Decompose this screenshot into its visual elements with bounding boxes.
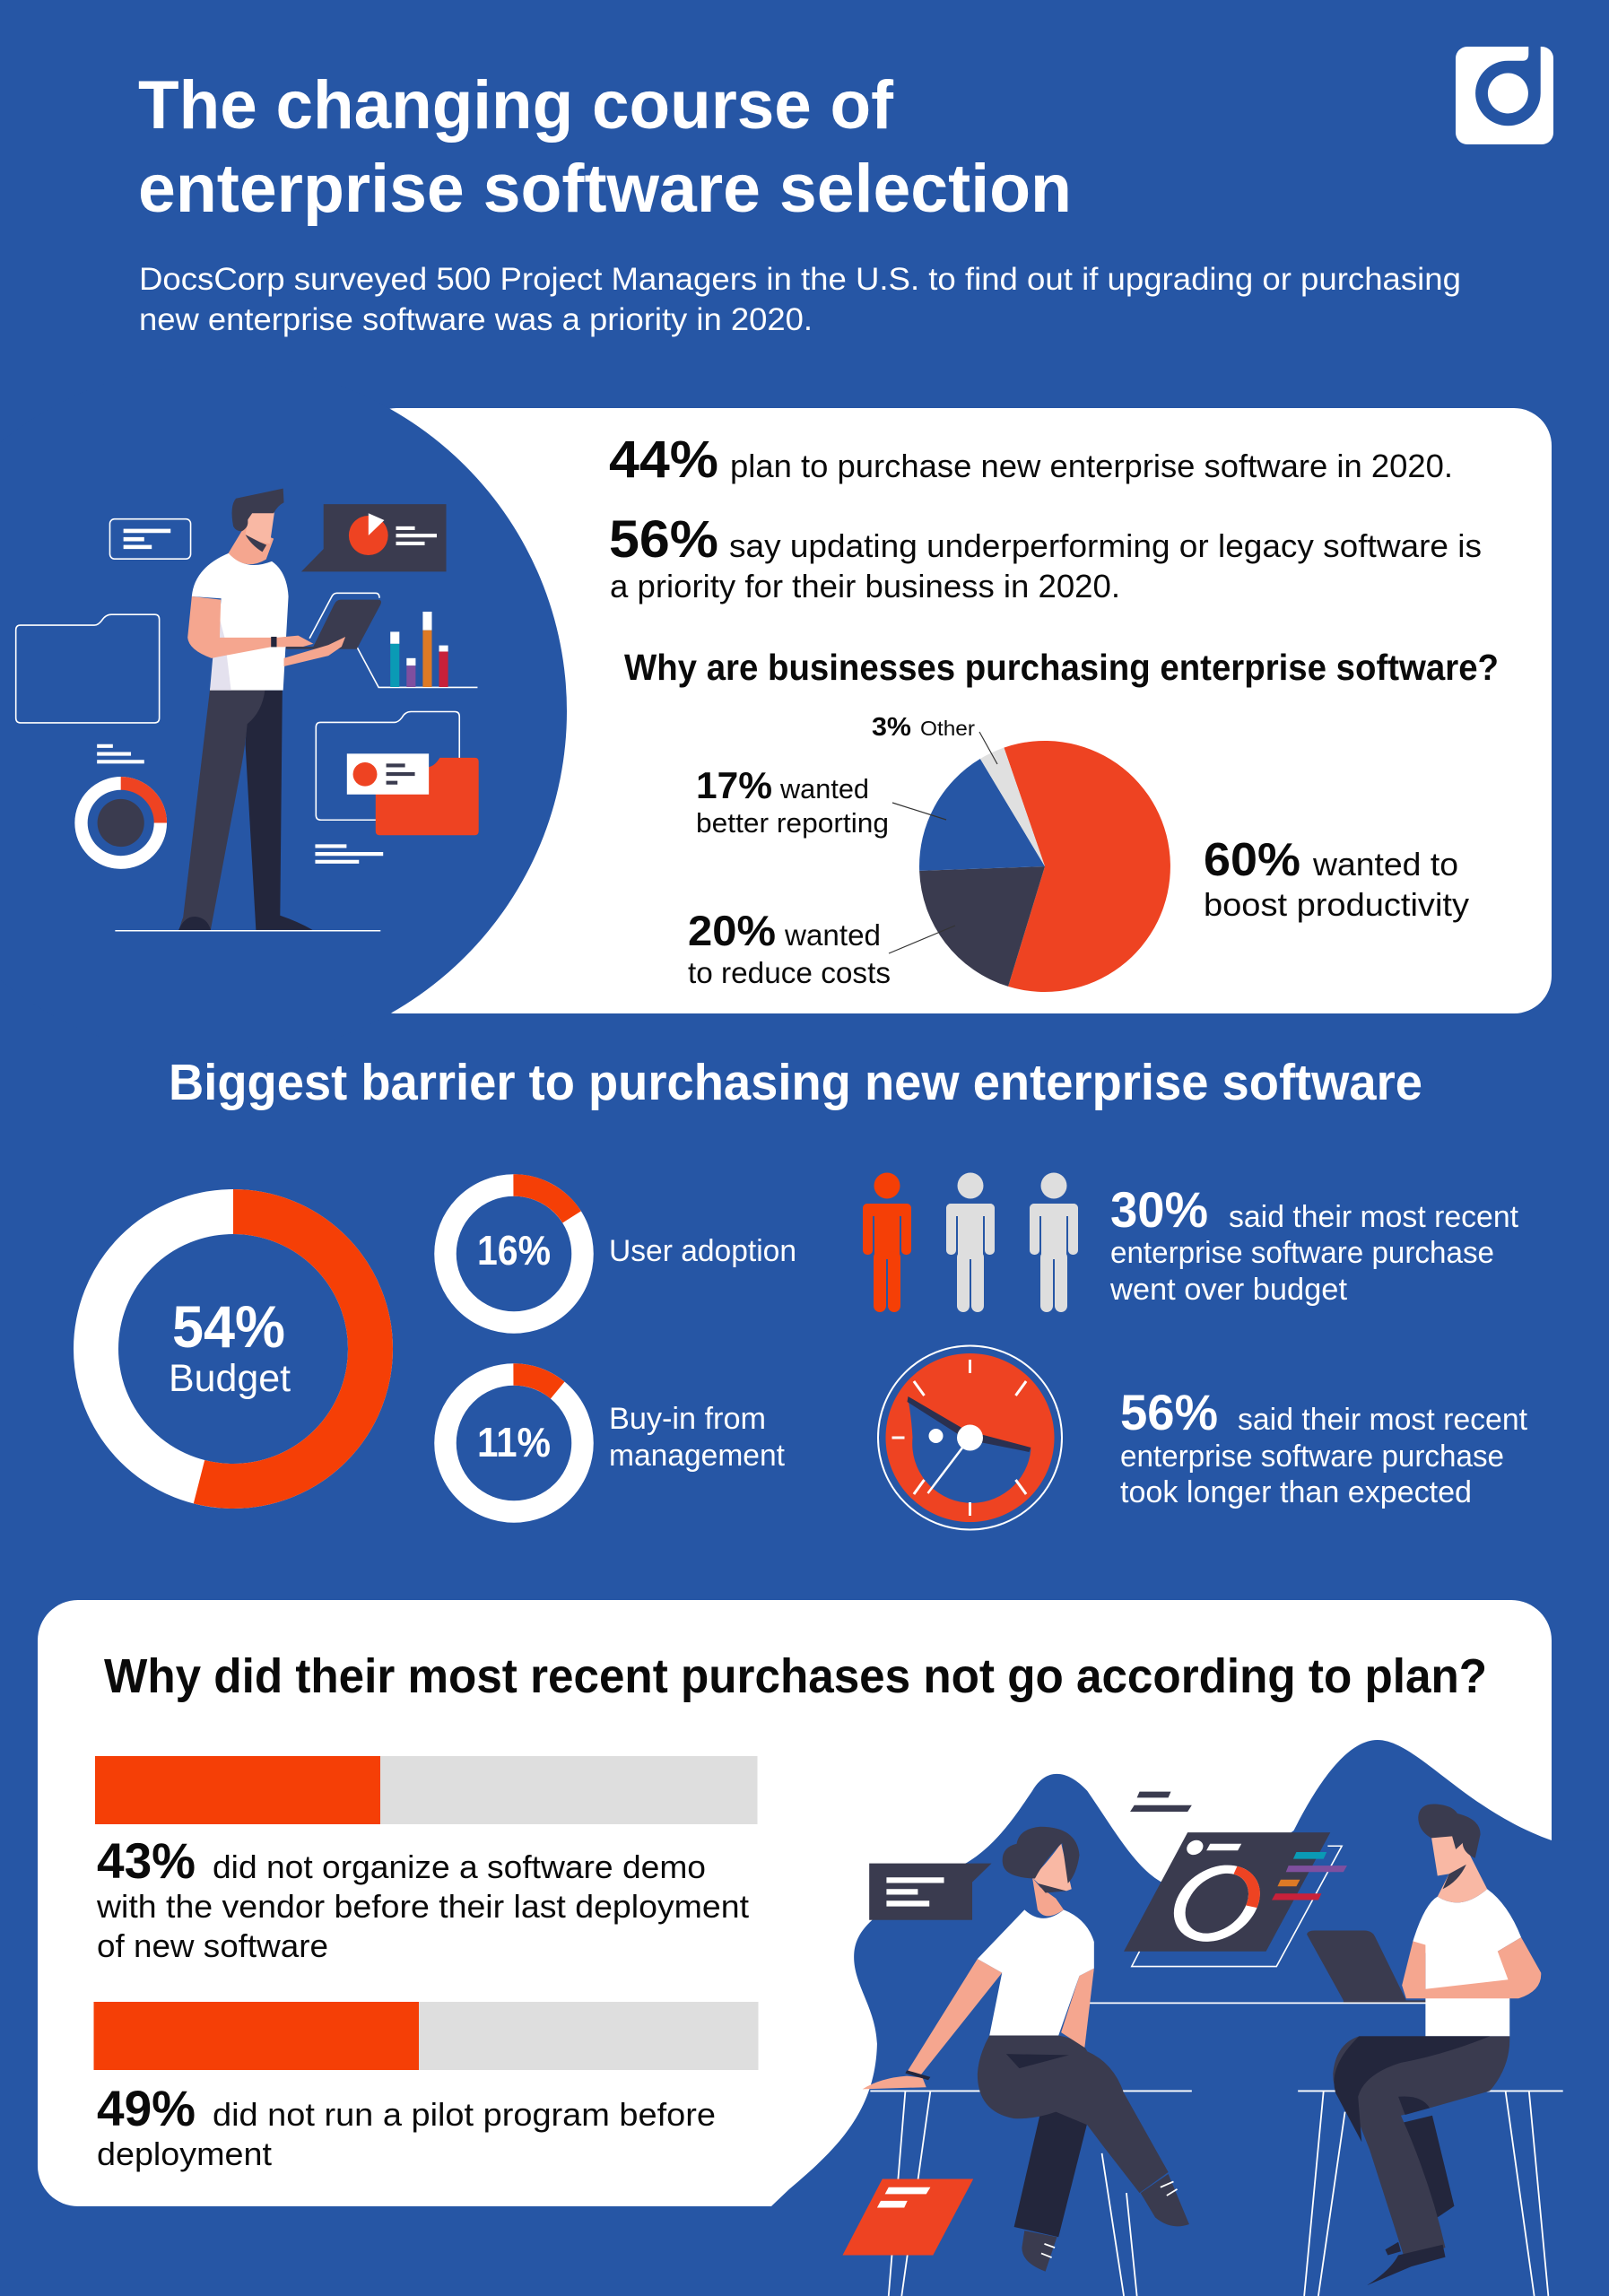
bar: 49% [93, 2002, 759, 2070]
heading: why purchasing: Why are businesses purchasing enterprise software? [624, 647, 1499, 688]
intro text: DocsCorp surveyed 500 Project Managers in the U.S. to find out if upgrading or purchasing [139, 262, 1461, 297]
text: 43% no software demo: did not organize a software demo [213, 1848, 706, 1885]
text: headline stats: say updating underperforming or legacy software is [729, 527, 1482, 564]
pie label: reduce costs: to reduce costs [688, 956, 891, 989]
pie label: reduce costs [688, 907, 891, 989]
pie label: better reporting: wanted [779, 773, 869, 804]
text: over budget stat [1109, 1181, 1519, 1307]
text: 43% no software demo [96, 1832, 749, 1964]
text: longer than expected stat: 56% [1120, 1384, 1218, 1440]
pie label: better reporting: better reporting [696, 807, 889, 839]
text: 49% no pilot program [97, 2080, 716, 2172]
donut: buy-in 11% [445, 1374, 583, 1512]
text: 49% no pilot program: 49% [97, 2080, 196, 2136]
text: longer than expected stat: took longer than expected [1120, 1475, 1472, 1509]
text: 49% no pilot program: deployment [97, 2135, 272, 2172]
pie label: boost productivity [1204, 834, 1469, 923]
illustration: man with laptop and charts [16, 489, 479, 931]
pie label: better reporting: 17% [696, 764, 772, 806]
text: 49% no pilot program: did not run a pilot program before [213, 2096, 716, 2133]
pie label: reduce costs: wanted [784, 918, 881, 952]
pie label: boost productivity: boost productivity [1204, 886, 1469, 923]
pie label: other: 3% [872, 713, 911, 742]
donut: budget 54%: Budget [169, 1357, 291, 1400]
text: over budget stat: 30% [1110, 1181, 1208, 1238]
donut: buy-in 11%: 11% [477, 1419, 551, 1465]
icon: clock [878, 1345, 1062, 1530]
pie label: other [872, 713, 975, 742]
text: 43% no software demo: of new software [97, 1927, 328, 1964]
text: headline stats: a priority for their business in 2020. [610, 568, 1120, 604]
label: user adoption: User adoption [609, 1234, 796, 1268]
label: buy-in from management: Buy-in from [609, 1402, 766, 1436]
bar: 43% [95, 1756, 757, 1824]
panel: why purchases failed [38, 1600, 1552, 2206]
label: buy-in from management: management [609, 1439, 786, 1473]
pie label: boost productivity: wanted to [1312, 846, 1458, 883]
pie label: other: Other [920, 717, 975, 740]
donut: user adoption 16% [445, 1186, 583, 1322]
pie chart [889, 732, 1170, 992]
icon: DocsCorp logo [1456, 47, 1553, 144]
pie label: reduce costs: 20% [688, 907, 776, 954]
text: longer than expected stat: enterprise software purchase [1120, 1439, 1504, 1474]
intro text [139, 262, 1461, 337]
text: headline stats: plan to purchase new enterprise software in 2020. [730, 448, 1453, 484]
label: buy-in from management [609, 1402, 786, 1473]
icon: three people [863, 1173, 1078, 1312]
title: The changing course of [138, 67, 894, 144]
text: over budget stat: said their most recent [1229, 1200, 1519, 1234]
blue circle backdrop [0, 364, 567, 1058]
text: headline stats: 56% [609, 510, 718, 569]
text: 43% no software demo: 43% [97, 1832, 196, 1889]
heading: not according to plan: Why did their most recent purchases not go according to plan? [104, 1649, 1487, 1703]
heading: biggest barrier: Biggest barrier to purchasing new enterprise software [169, 1054, 1422, 1111]
donut: budget 54%: 54% [172, 1293, 285, 1360]
text: headline stats [609, 430, 1482, 604]
text: over budget stat: went over budget [1109, 1273, 1348, 1307]
title [138, 67, 1072, 227]
text: headline stats: 44% [609, 430, 718, 489]
pie label: boost productivity: 60% [1204, 834, 1300, 886]
panel: purchase plans [0, 364, 1552, 1058]
intro text: new enterprise software was a priority in 2020. [139, 302, 813, 337]
text: longer than expected stat [1120, 1384, 1528, 1509]
text: longer than expected stat: said their most recent [1238, 1403, 1528, 1437]
text: over budget stat: enterprise software purchase [1110, 1236, 1494, 1270]
illustration: two colleagues at a table [771, 1740, 1609, 2296]
donut: budget 54% [96, 1212, 370, 1486]
donut: user adoption 16%: 16% [477, 1227, 551, 1274]
text: 43% no software demo: with the vendor before their last deployment [96, 1888, 749, 1925]
title: enterprise software selection [138, 151, 1072, 227]
pie label: better reporting [696, 764, 889, 839]
